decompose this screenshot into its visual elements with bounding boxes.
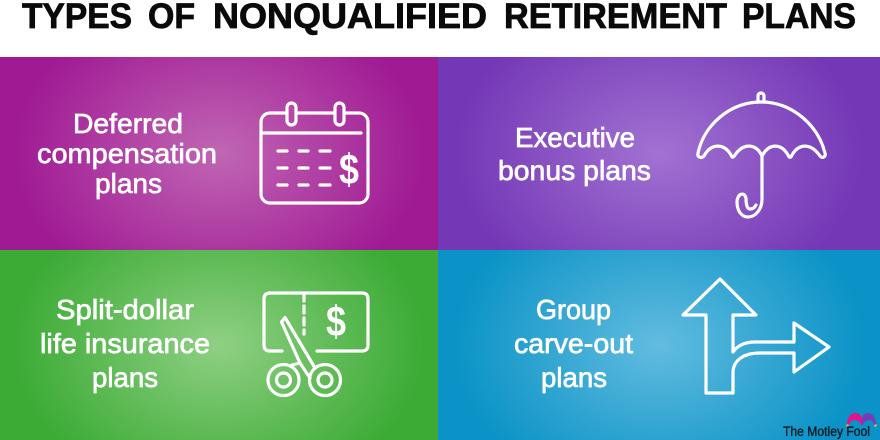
text: split-dollar life insurance plans: Split-dollar	[56, 294, 194, 325]
text: deferred compensation plans: plans	[95, 168, 162, 199]
title	[22, 0, 856, 36]
logo: The Motley Fool	[783, 413, 877, 439]
text: group carve-out plans: plans	[541, 362, 607, 393]
text: executive bonus plans	[498, 122, 651, 186]
logo: jester hat	[846, 413, 877, 427]
panel: deferred compensation plans	[0, 57, 438, 250]
text: split-dollar life insurance plans	[40, 294, 210, 393]
icon: forking arrow	[683, 279, 829, 393]
text: group carve-out plans	[514, 294, 633, 393]
icon: umbrella	[698, 93, 825, 217]
panel: executive bonus plans	[438, 57, 880, 250]
panel: group carve-out plans	[438, 250, 880, 440]
icon: calendar with dollar sign	[261, 103, 368, 203]
logo: The Motley Fool: The Motley Fool	[783, 424, 870, 439]
text: deferred compensation plans: Deferred	[73, 108, 183, 139]
text: group carve-out plans: carve-out	[514, 328, 633, 359]
text: deferred compensation plans	[37, 108, 217, 199]
text: split-dollar life insurance plans: life insurance	[40, 328, 210, 359]
icon: scissors cutting a dollar bill	[264, 293, 368, 396]
text: executive bonus plans: bonus plans	[498, 155, 651, 186]
text: group carve-out plans: Group	[536, 294, 611, 325]
icon: calendar with dollar sign: $	[339, 146, 359, 194]
text: deferred compensation plans: compensation	[37, 138, 217, 169]
icon: scissors cutting a dollar bill: $	[326, 298, 346, 346]
text: split-dollar life insurance plans: plans	[92, 362, 158, 393]
text: executive bonus plans: Executive	[515, 122, 635, 153]
panel: split-dollar life insurance plans	[0, 250, 438, 440]
